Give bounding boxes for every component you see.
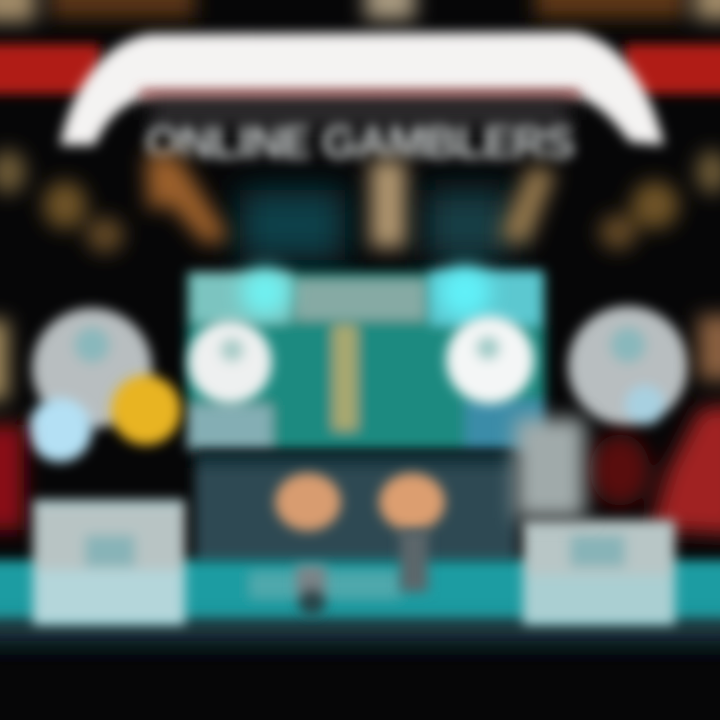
teal floor	[0, 560, 720, 622]
title banner	[60, 32, 664, 145]
right grey chip stack	[515, 418, 585, 518]
title band	[150, 103, 570, 121]
top decorative strip	[0, 0, 720, 22]
upper dark teal panel	[240, 190, 510, 260]
gold figures above panel	[0, 150, 720, 253]
floor fade	[0, 622, 720, 640]
bottom dark fade	[0, 644, 720, 652]
title text: ONLINE GAMBLERS	[145, 116, 575, 168]
blue coin	[28, 398, 92, 462]
glow accents in central panel	[241, 266, 491, 318]
left light card	[33, 500, 185, 625]
red banner ends	[0, 44, 720, 94]
central teal panel	[187, 270, 545, 450]
central white circles	[188, 316, 534, 404]
right grey circle	[568, 306, 688, 426]
side red figures	[0, 315, 720, 535]
banner underline	[140, 90, 580, 98]
lower dark panel	[195, 452, 517, 565]
left grey circle	[32, 308, 152, 428]
stems below hands	[296, 530, 428, 616]
hands	[275, 473, 445, 531]
right light card	[523, 520, 675, 625]
gold coin	[111, 375, 181, 445]
